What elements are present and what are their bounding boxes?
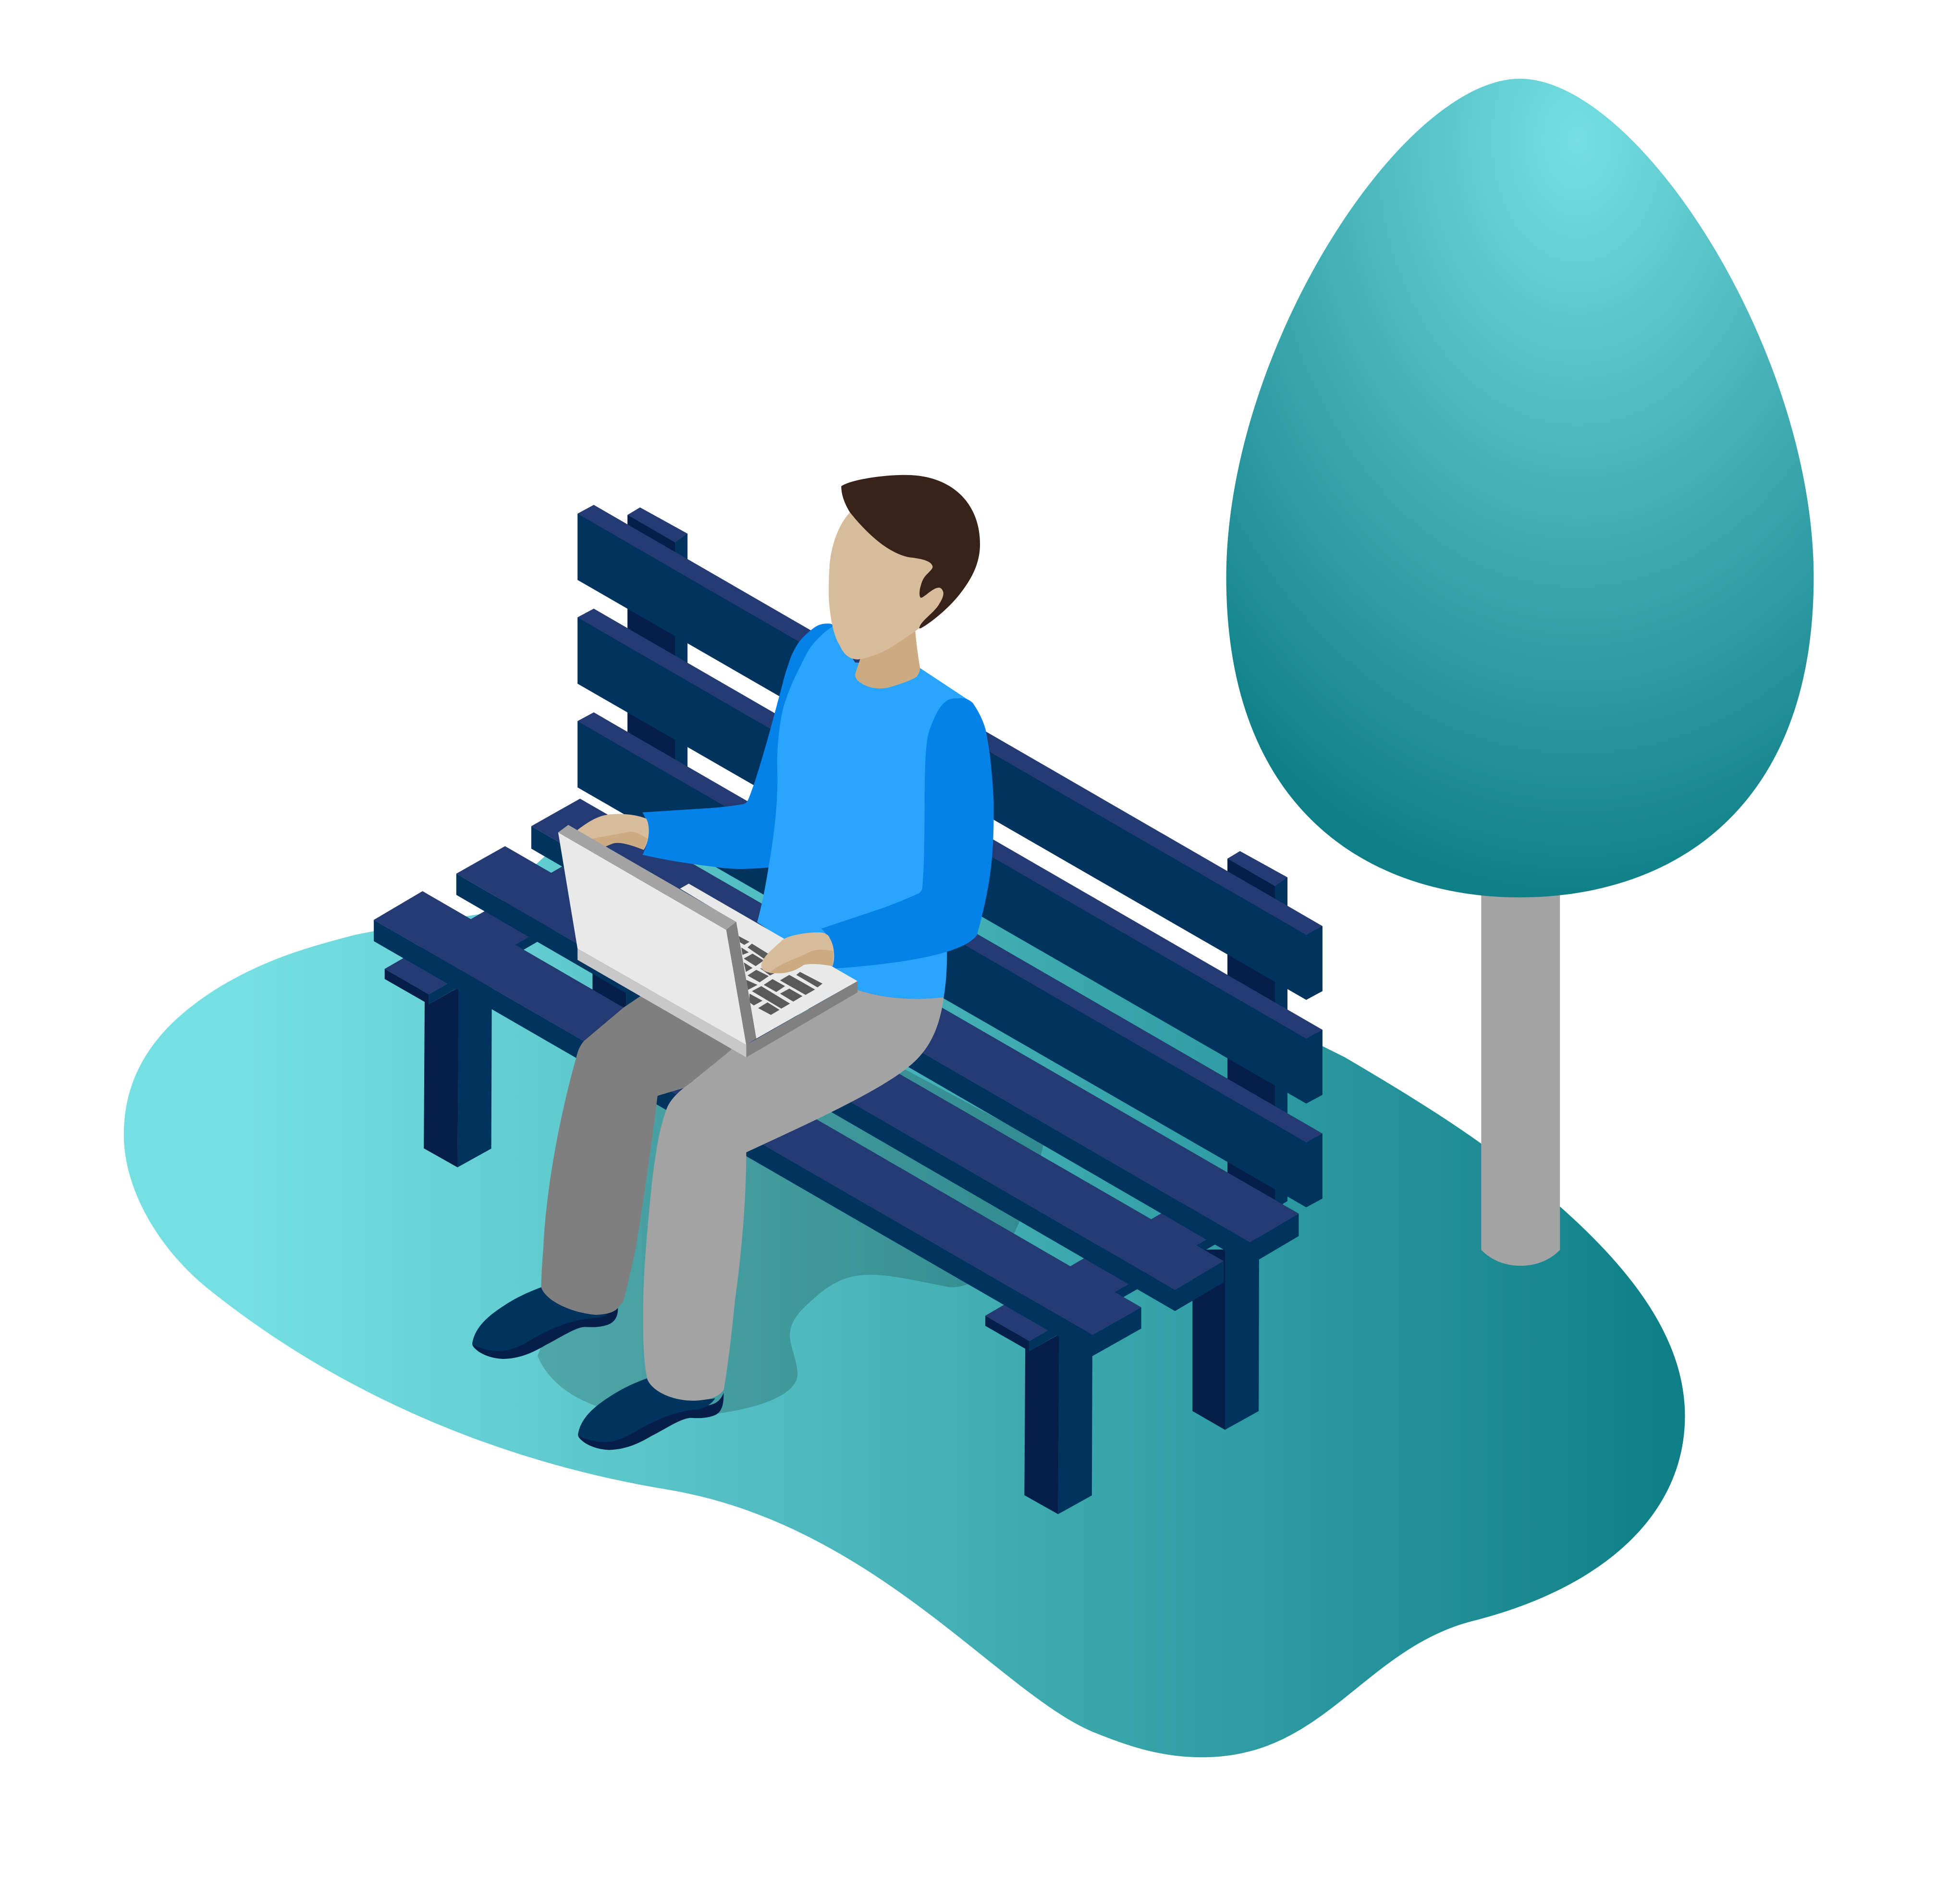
neck bbox=[855, 625, 920, 688]
right hand bbox=[761, 932, 834, 973]
bench bbox=[374, 505, 1323, 1514]
tree trunk bbox=[1481, 875, 1560, 1266]
left hand bbox=[577, 814, 649, 850]
laptop top edge bbox=[558, 825, 736, 930]
far shoe bbox=[472, 1287, 618, 1359]
hair bbox=[841, 475, 980, 628]
face bbox=[829, 506, 950, 660]
near leg bbox=[643, 990, 944, 1401]
laptop base side bbox=[746, 981, 858, 1057]
near shoe bbox=[578, 1378, 723, 1450]
tree bbox=[1226, 79, 1813, 1266]
tree foliage bbox=[1226, 79, 1813, 897]
shirt torso bbox=[757, 626, 976, 999]
laptop front lip bbox=[577, 949, 746, 1057]
bench rear right leg bbox=[1192, 1219, 1259, 1430]
laptop screen back bbox=[558, 832, 746, 1045]
person bbox=[472, 475, 994, 1450]
bench front right leg bbox=[1024, 1309, 1092, 1514]
bench back posts bbox=[627, 507, 1287, 1209]
bench shadow bbox=[538, 1000, 1044, 1418]
laptop bbox=[558, 825, 858, 1057]
far leg bbox=[541, 981, 750, 1315]
bench seat cross beams bbox=[385, 837, 1262, 1351]
left sleeve bbox=[643, 624, 833, 869]
laptop screen side bbox=[726, 922, 756, 1045]
bench back slats bbox=[577, 505, 1323, 1207]
bench front left leg bbox=[424, 962, 492, 1167]
laptop keyboard bbox=[739, 936, 822, 1015]
bench seat slats bbox=[374, 799, 1298, 1356]
ground blob bbox=[124, 819, 1685, 1757]
right sleeve bbox=[821, 698, 994, 968]
laptop base top bbox=[680, 884, 858, 1039]
bench rear left leg bbox=[592, 968, 659, 1019]
